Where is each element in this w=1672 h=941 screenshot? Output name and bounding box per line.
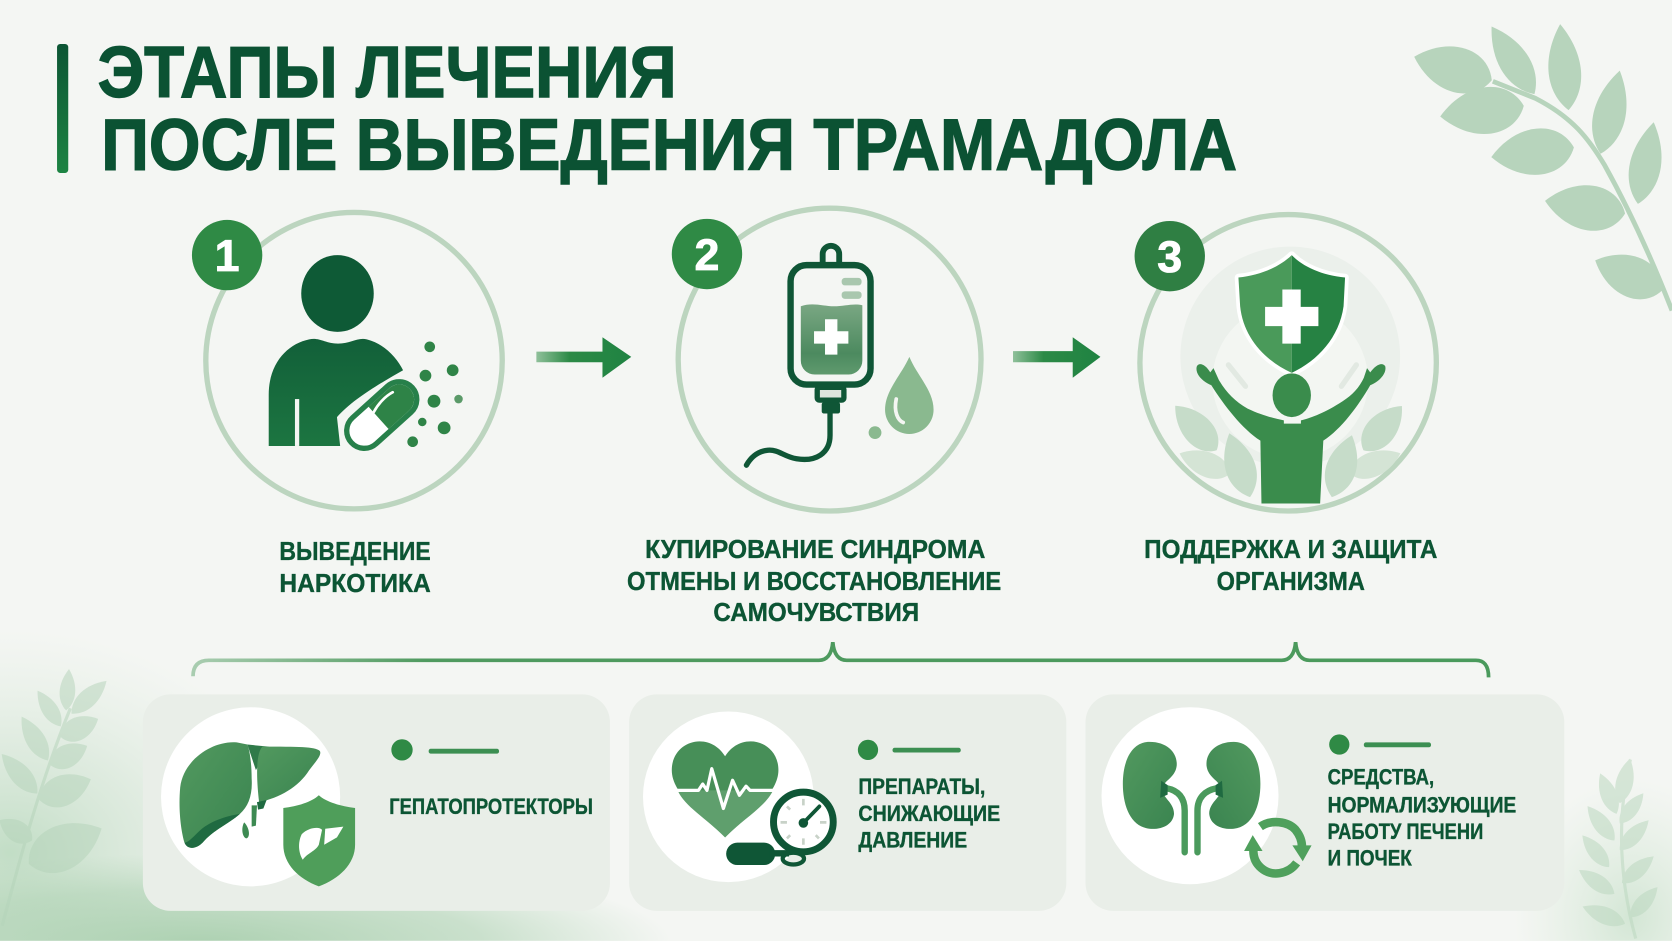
card label: НОРМАЛИЗУЮЩИЕ (1328, 792, 1516, 817)
step 3 badge: 3 (1157, 232, 1182, 282)
card label: И ПОЧЕК (1328, 846, 1412, 871)
step 1 badge (192, 220, 262, 290)
step 3 ring (1140, 215, 1436, 511)
decorative branch: top right (1408, 19, 1672, 311)
card background (629, 694, 1066, 911)
step 1 label (279, 538, 431, 598)
step 2 badge (672, 219, 742, 289)
icon: circular arrows (1244, 822, 1312, 873)
icon: tonometer (726, 792, 833, 865)
card label: ПРЕПАРАТЫ, (858, 774, 985, 799)
card background (143, 694, 610, 911)
white icon disc (643, 711, 814, 882)
card marker (858, 740, 961, 760)
panel: blood pressure medication (629, 694, 1066, 911)
step 1 (192, 212, 502, 598)
step 1 badge: 1 (215, 231, 240, 281)
step 2 label: САМОЧУВСТВИЯ (713, 599, 919, 627)
card label (1328, 765, 1516, 871)
white icon disc (1102, 707, 1279, 884)
decorative branch: bottom right (1575, 757, 1663, 939)
card label: РАБОТУ ПЕЧЕНИ (1328, 819, 1483, 844)
panel: liver and kidney normalizers (1086, 694, 1564, 911)
icon: person with raised arms (1196, 364, 1385, 504)
decorative branch: bottom left (0, 668, 113, 926)
step 2 badge: 2 (695, 230, 719, 280)
card label: ГЕПАТОПРОТЕКТОРЫ (389, 794, 593, 819)
title text: ЭТАПЫ ЛЕЧЕНИЯ (98, 32, 677, 113)
card label (858, 774, 1000, 852)
step 1 ring (206, 212, 502, 509)
title text (98, 32, 1237, 185)
arrow: step 1 to step 2 (536, 337, 631, 378)
card background (1086, 694, 1564, 911)
step 3 badge (1135, 221, 1205, 291)
step 3 label (1144, 536, 1437, 596)
card label: ДАВЛЕНИЕ (858, 827, 967, 852)
arrow: step 2 to step 3 (1013, 337, 1100, 378)
step 1 label: ВЫВЕДЕНИЕ (279, 538, 431, 566)
icon: shield with liver (283, 795, 355, 886)
icon: person with dissolving pill (269, 255, 463, 459)
bracket linking steps to cards (193, 642, 1489, 677)
step 1 label: НАРКОТИКА (279, 570, 431, 598)
icon: heart with pulse (672, 741, 778, 837)
icon: liver (180, 742, 320, 848)
card marker (391, 739, 499, 761)
icon: shield with cross (1238, 255, 1345, 373)
step 2 label: КУПИРОВАНИЕ СИНДРОМА (645, 536, 985, 564)
step 2 (627, 208, 1001, 627)
title text: ПОСЛЕ ВЫВЕДЕНИЯ ТРАМАДОЛА (101, 104, 1237, 185)
icon: kidneys (1123, 742, 1260, 852)
icon: side leaves (1164, 396, 1413, 502)
step 3 label: ОРГАНИЗМА (1217, 568, 1365, 596)
step 2 label (627, 536, 1001, 627)
white icon disc (161, 707, 340, 886)
step 2 ring (678, 208, 981, 511)
step 3 (1135, 215, 1437, 596)
card label: СРЕДСТВА, (1328, 765, 1434, 790)
title accent bar (57, 44, 68, 173)
step 3 label: ПОДДЕРЖКА И ЗАЩИТА (1144, 536, 1437, 564)
panel: hepatoprotectors (143, 694, 610, 911)
icon: IV drip bag (746, 246, 934, 465)
card label: СНИЖАЮЩИЕ (858, 801, 1000, 826)
corner green haze (0, 629, 1672, 941)
step 3 soft halo (1180, 247, 1400, 466)
title (57, 32, 1237, 185)
card marker (1329, 734, 1431, 755)
step 2 label: ОТМЕНЫ И ВОССТАНОВЛЕНИЕ (627, 568, 1001, 596)
